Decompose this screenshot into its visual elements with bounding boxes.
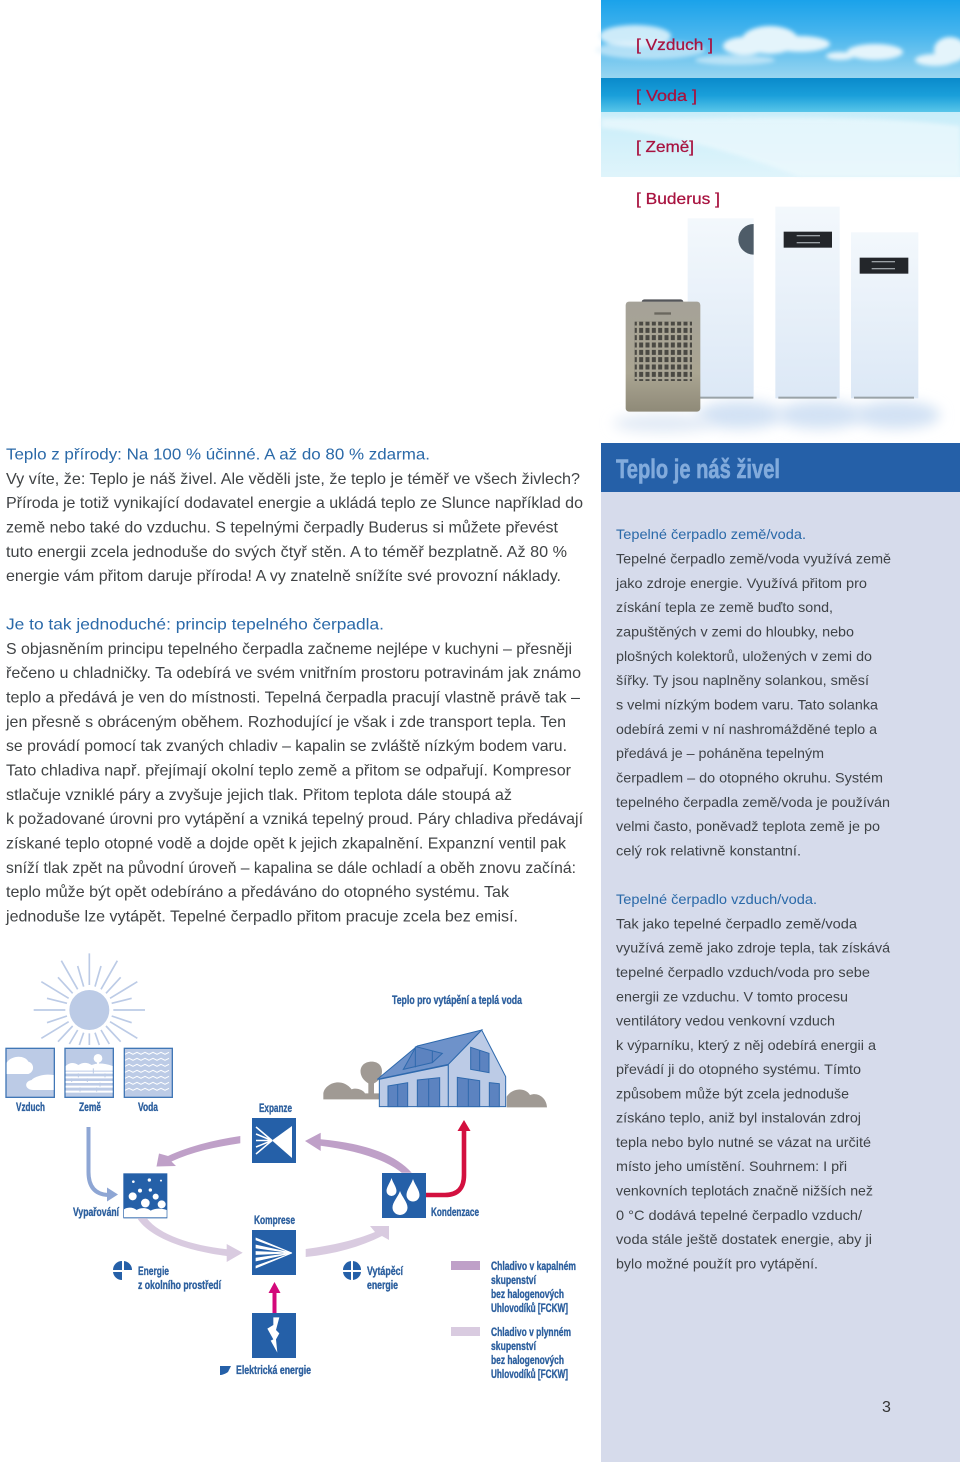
sidebar: air/water heat pump text: způsobem může být zcela jednoduše: [616, 1086, 849, 1102]
sidebar: air/water heat pump text: energii ze vzduchu. V tomto procesu: [616, 988, 848, 1004]
intro text block: [6, 446, 583, 585]
legend: liquid refrigerant: Uhlovodíků [FCKW]: [491, 1301, 568, 1315]
principle text block: sníží tlak zpět na původní úroveň – kapalina se dále ochladí a oběh znovu začíná:: [6, 859, 576, 877]
navigation labels: [ Voda ]: [636, 88, 697, 105]
arrow: condenser to house: [426, 1120, 470, 1195]
sidebar: ground/water heat pump text: získání tepla ze země buďto sond,: [616, 599, 833, 615]
principle text block: jednoduše lze vytápět. Tepelné čerpadlo přitom pracuje zcela bez emisí.: [5, 908, 518, 926]
sidebar: air/water heat pump text: tepla nebo bylo nutné se vázat na určité: [616, 1134, 871, 1150]
sidebar: ground/water heat pump text: celý rok relativně konstantní.: [616, 842, 801, 858]
page number: 3: [882, 1399, 891, 1416]
principle text block: Tato chladiva např. přejímají okolní teplo země a přitom se odpařují. Kompresor: [6, 762, 572, 780]
legend: gaseous refrigerant: Chladivo v plynném: [491, 1325, 571, 1339]
sidebar: ground/water heat pump text: plošných kolektorů, uložených v zemi do: [616, 648, 872, 664]
product photo: heat pumps: [613, 207, 940, 432]
intro text block: tuto energii zcela jednoduše do svých čtyř stěn. A to téměř bezplatně. Až 80 %: [6, 544, 567, 561]
sidebar header: [601, 443, 960, 492]
sidebar: air/water heat pump text: voda stále ještě dostatek energie, aby ji: [616, 1231, 872, 1247]
legend: environmental energy: [113, 1261, 221, 1292]
intro text block: Příroda je totiž vynikající dodavatel energie a ukládá teplo ze Slunce například do: [6, 495, 583, 512]
sidebar: ground/water heat pump text: velmi často, poněvadž teplota země je po: [616, 818, 880, 834]
sidebar: ground/water heat pump text: odebírá zemi v ní nashromážděné teplo a: [616, 721, 877, 737]
sidebar: air/water heat pump text: 0 °C dodává tepelné čerpadlo vzduch/: [616, 1207, 862, 1223]
arrow: liquid condenser to expansion: [305, 1133, 412, 1173]
sidebar: air/water heat pump text: k výparníku, který z něj odebírá energii a: [616, 1037, 876, 1053]
source labels: Vzduch: [16, 1100, 45, 1114]
icon: water: [124, 1048, 172, 1097]
navigation labels: [ Vzduch ]: [636, 37, 713, 54]
sidebar: air/water heat pump text: [616, 891, 890, 1272]
principle text block: získané teplo otopné vodě a dojde opět k jejich zkapalnění. Expanzní ventil pak: [6, 836, 567, 852]
principle text block: teplo a předává je ven do místnosti. Tepelná čerpadla pracují vlastně právě tak –: [6, 690, 580, 706]
sidebar: ground/water heat pump text: [615, 526, 891, 858]
sidebar: air/water heat pump text: využívá země jako zdroje tepla, tak získává: [616, 940, 890, 956]
icon: condensation: [382, 1173, 426, 1218]
label: Expanze: Expanze: [259, 1101, 292, 1115]
principle text block: k požadované úrovni pro vytápění a vzniká tepelný proud. Páry chladiva předávají: [6, 811, 584, 828]
intro text block: země nebo také do vzduchu. S tepelnými čerpadly Buderus si můžete převést: [6, 518, 559, 536]
legend: gaseous refrigerant: bez halogenových: [491, 1353, 564, 1367]
arrow: liquid expansion to evaporator: [156, 1136, 240, 1166]
beach photo: [595, 0, 960, 177]
label: Komprese: Komprese: [254, 1213, 295, 1227]
principle text block: řečeno u chladničky. Ta odebírá ve svém vnitřním prostoru potravinám jak známo: [6, 665, 581, 682]
sidebar: air/water heat pump text: místo jeho umístění. Souhrnem: I při: [616, 1158, 847, 1174]
sidebar: ground/water heat pump text: tepelného čerpadla země/voda je používán: [616, 794, 890, 810]
sidebar panel: [601, 492, 960, 1462]
icon: expansion valve: [252, 1118, 296, 1163]
icon: sun: [34, 953, 145, 1045]
source labels: Země: [79, 1100, 101, 1114]
navigation labels: [636, 37, 720, 208]
label: Elektrická energie: Elektrická energie: [236, 1363, 311, 1377]
legend: environmental energy: z okolního prostředí: [138, 1278, 221, 1292]
sidebar header: Teplo je náš živel: [616, 454, 780, 484]
sidebar: air/water heat pump text: Tak jako tepelné čerpadlo země/voda: [616, 916, 857, 932]
legend: liquid refrigerant: skupenství: [491, 1273, 536, 1287]
sidebar: air/water heat pump text: ventilátory vedou venkovní vzduch: [616, 1012, 835, 1028]
sidebar: air/water heat pump text: získáno teplo, aniž byl instalován zdroj: [616, 1110, 861, 1126]
legend: gaseous refrigerant: [451, 1325, 571, 1381]
principle text block: stlačuje vzniklé páry a zvyšuje jejich tlak. Přitom teplota dále stoupá až: [6, 787, 512, 804]
label: Vypařování: Vypařování: [73, 1205, 119, 1219]
source labels: Voda: [138, 1100, 158, 1114]
heat pump unit 1: [688, 218, 754, 399]
legend: liquid refrigerant: Chladivo v kapalném: [491, 1259, 576, 1273]
arrow: environment to evaporator: [88, 1127, 118, 1202]
principle text block: Je to tak jednoduché: princip tepelného čerpadla.: [6, 616, 384, 634]
sidebar: air/water heat pump text: venkovních teplotách značně nižších než: [616, 1182, 873, 1198]
icon: ground: [65, 1048, 113, 1097]
legend: gaseous refrigerant: Uhlovodíků [FCKW]: [491, 1367, 568, 1381]
sidebar: ground/water heat pump text: Tepelné čerpadlo země/voda.: [616, 526, 806, 542]
sidebar: air/water heat pump text: tepelné čerpadlo vzduch/voda pro sebe: [616, 964, 870, 980]
icon: electricity: [252, 1313, 296, 1358]
sidebar: air/water heat pump text: převádí ji do otopného systému. Tímto: [616, 1061, 861, 1077]
label: Elektrická energie: [220, 1363, 311, 1377]
heat pump unit 3: [851, 232, 918, 399]
label: Kondenzace: Kondenzace: [431, 1205, 479, 1219]
navigation labels: [ Buderus ]: [636, 191, 720, 208]
legend: heating energy: [343, 1261, 403, 1292]
icon: compression: [252, 1230, 296, 1275]
sidebar: ground/water heat pump text: čerpadlem – do otopného okruhu. Systém: [616, 770, 883, 786]
principle text block: jen přesně s obráceným oběhem. Rozhodující je však i zde transport tepla. Ten: [5, 714, 566, 731]
intro text block: Vy víte, že: Teplo je náš živel. Ale věděli jste, že teplo je téměř ve všech živlech?: [6, 471, 580, 488]
sidebar: ground/water heat pump text: zapuštěných v zemi do hloubky, nebo: [616, 624, 854, 640]
intro text block: energie vám přitom daruje příroda! A vy znatelně snížíte své provozní náklady.: [6, 568, 561, 585]
heat pump unit 2: [775, 207, 840, 399]
legend: gaseous refrigerant: skupenství: [491, 1339, 536, 1353]
principle text block: teplo může být opět odebíráno a předáváno do otopného systému. Tak: [6, 883, 510, 901]
icon: air: [6, 1048, 54, 1097]
sidebar: ground/water heat pump text: jako zdroje energie. Využívá přitom pro: [615, 575, 867, 591]
legend: heating energy: Vytápěcí: [367, 1264, 403, 1278]
arrow: gas evaporator to compressor: [137, 1218, 243, 1262]
sidebar: ground/water heat pump text: Tepelné čerpadlo země/voda využívá země: [616, 550, 891, 566]
heading: heat for heating and hot water: Teplo pro vytápění a teplá voda: [392, 993, 522, 1007]
legend: liquid refrigerant: [451, 1259, 576, 1315]
navigation labels: [ Země]: [636, 139, 694, 156]
source labels: [16, 1100, 158, 1114]
legend: liquid refrigerant: bez halogenových: [491, 1287, 564, 1301]
principle text block: se provádí pomocí tak zvaných chladiv – kapalin se zvláště nízkým bodem varu.: [6, 738, 567, 755]
outdoor unit: [626, 299, 700, 412]
legend: environmental energy: Energie: [138, 1264, 169, 1278]
sidebar: ground/water heat pump text: předává je – poháněna tepelným: [616, 745, 824, 761]
legend: heating energy: energie: [367, 1278, 398, 1292]
sidebar: air/water heat pump text: bylo možné použít pro vytápění.: [616, 1256, 818, 1272]
icon: house: [323, 1030, 547, 1107]
intro text block: Teplo z přírody: Na 100 % účinné. A až do 80 % zdarma.: [6, 446, 430, 464]
icon: evaporation: [123, 1173, 167, 1218]
arrow: gas compressor to condenser: [306, 1226, 389, 1257]
sidebar: ground/water heat pump text: s velmi nízkým bodem varu. Tato solanka: [616, 696, 878, 712]
heat pump diagram: [6, 953, 576, 1381]
arrow: electricity to compressor: [268, 1282, 280, 1313]
sidebar: ground/water heat pump text: šířky. Ty jsou naplněny solankou, směsí: [616, 672, 869, 688]
sidebar: air/water heat pump text: Tepelné čerpadlo vzduch/voda.: [616, 891, 817, 907]
principle text block: [5, 616, 584, 926]
principle text block: S objasněním principu tepelného čerpadla začneme nejlépe v kuchyni – přesněji: [6, 641, 572, 658]
